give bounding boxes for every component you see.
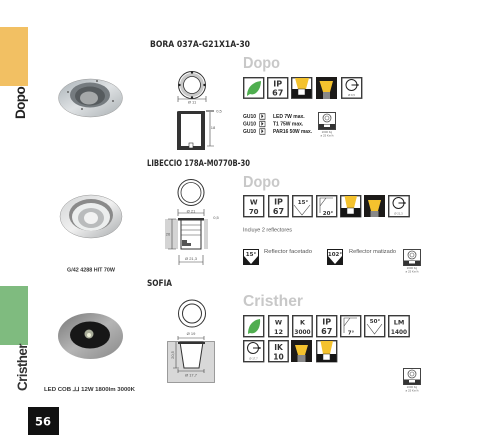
technical drawing: Bora: 18 bbox=[211, 125, 216, 130]
icon: load rating bbox=[318, 112, 336, 138]
icon: IP 67 bbox=[269, 196, 288, 217]
technical drawing: Bora: 0,5 bbox=[216, 108, 223, 114]
label: matte reflector: Reflector matizado bbox=[349, 249, 396, 255]
lamp compatibility list: GU10 bbox=[243, 114, 256, 120]
icon: K 3000: 3000 bbox=[294, 330, 311, 336]
icon: cut-out gauge: Ø 17,7 bbox=[249, 356, 258, 360]
icon: W 12 bbox=[269, 316, 288, 337]
icon: beam 15 degrees bbox=[293, 196, 312, 217]
tab: Dopo colour bbox=[0, 27, 28, 86]
page number bbox=[28, 407, 59, 435]
note: reflectors included: Incluye 2 reflectores bbox=[243, 228, 292, 234]
lamp compatibility list: LED 7W max. bbox=[273, 114, 305, 120]
technical drawing: Bora bbox=[177, 71, 223, 150]
icon: IP 67: 67 bbox=[272, 88, 283, 98]
icon: K 3000: K bbox=[300, 318, 306, 326]
technical drawing: Libeccio: 0,5 bbox=[213, 215, 220, 220]
icon: reflector 102 degrees bbox=[327, 249, 343, 265]
icon: beam dark bbox=[364, 195, 385, 217]
icon: cut-out gauge bbox=[389, 196, 409, 217]
icon: tilt 20 degrees: 20° bbox=[323, 211, 333, 217]
icon: tilt 7 degrees bbox=[341, 316, 361, 337]
icon: IP 67: 67 bbox=[273, 207, 284, 216]
icon: IK 10: 10 bbox=[273, 352, 284, 362]
lamp compatibility list bbox=[243, 113, 313, 135]
icon: load rating: ø 25 Km/h bbox=[406, 388, 419, 392]
icon: cut-out gauge: Ø 21,3 bbox=[394, 212, 403, 216]
icon: W 70 bbox=[244, 196, 264, 217]
icon: IK 10 bbox=[269, 341, 288, 362]
lamp compatibility list: PAR16 50W max. bbox=[273, 129, 313, 135]
lamp compatibility list: ⏵⃞ bbox=[259, 120, 266, 128]
lamp compatibility list: ⏵⃞ bbox=[259, 128, 266, 135]
technical drawing: Libeccio: 26 bbox=[166, 232, 171, 236]
icon: tilt 7 degrees: 7° bbox=[348, 330, 355, 336]
technical drawing: Libeccio bbox=[165, 180, 220, 265]
icon: reflector 15 degrees: 15° bbox=[246, 252, 256, 258]
icon: beam up bbox=[292, 78, 312, 98]
icon: W 70: W bbox=[250, 198, 258, 206]
technical drawing: Sofia: Ø 17,7 bbox=[185, 372, 198, 378]
product photo: Sofia lamp bbox=[58, 313, 123, 359]
icon: W 12: W bbox=[275, 318, 282, 326]
tab label: Dopo: Dopo bbox=[13, 87, 28, 119]
icon: cut-out gauge bbox=[342, 78, 362, 98]
icon: reflector 15 degrees bbox=[243, 249, 259, 265]
icon: beam 15 degrees: 15° bbox=[298, 200, 308, 206]
icon: beam dark bbox=[291, 340, 312, 362]
icon: LM 1400: LM bbox=[394, 318, 404, 326]
icon: W 12: 12 bbox=[274, 328, 283, 336]
icon: load rating: ø 25 Km/h bbox=[406, 270, 419, 274]
technical drawing: Libeccio: Ø 21,3 bbox=[185, 256, 198, 261]
product photo: Libeccio lamp bbox=[60, 195, 122, 238]
tab: Cristher colour bbox=[0, 286, 28, 345]
heading: Cristher: Cristher bbox=[243, 293, 303, 310]
technical drawing: Bora: Ø 11 bbox=[188, 100, 197, 104]
heading: Dopo (Libeccio): Dopo bbox=[243, 174, 280, 191]
icon: IP 67 bbox=[268, 78, 288, 98]
icon: cut-out gauge bbox=[244, 341, 264, 362]
icon: load rating: 2000 Kg bbox=[407, 266, 418, 270]
icon: load rating bbox=[404, 368, 420, 392]
lamp compatibility list: T1 75W max. bbox=[273, 122, 304, 128]
icon: W 70: 70 bbox=[249, 208, 259, 216]
heading: Dopo (Bora): Dopo bbox=[243, 55, 280, 72]
title: Bora: BORA 037A-G21X1A-30 bbox=[150, 40, 250, 50]
icon: load rating bbox=[404, 250, 420, 274]
icon: IK 10: IK bbox=[274, 343, 284, 352]
icon: IP 67: IP bbox=[274, 198, 283, 206]
icon: beam up bbox=[341, 196, 361, 217]
lamp compatibility list: GU10 bbox=[243, 122, 256, 128]
icon: K 3000 bbox=[293, 316, 312, 337]
icon: reflector 102 degrees: 102° bbox=[328, 252, 342, 258]
icon: LM 1400: 1400 bbox=[391, 330, 407, 336]
title: Sofia: SOFIA bbox=[147, 279, 172, 289]
icon: leaf bbox=[244, 316, 264, 337]
icon: beam 50 degrees: 50° bbox=[370, 319, 380, 325]
icon: beam dark bbox=[316, 77, 337, 99]
technical drawing: Sofia: Ø 19 bbox=[187, 331, 196, 336]
technical drawing: Sofia bbox=[168, 300, 214, 382]
icon: LM 1400 bbox=[389, 316, 409, 337]
icon: leaf bbox=[244, 78, 264, 98]
icon: cut-out gauge: Ø 9,5 bbox=[348, 93, 355, 97]
product photo: Bora lamp bbox=[58, 79, 122, 117]
icon: load rating: 2000 Kg bbox=[407, 385, 418, 389]
icon: load rating: ø 25 Km/h bbox=[321, 134, 334, 138]
icon: load rating: 2000 Kg bbox=[322, 130, 333, 134]
product label: Sofia specs: LED COB ⅃⅃ 12W 1800lm 3000K bbox=[44, 386, 135, 393]
product label: Libeccio specs: G/42 4288 HIT 70W bbox=[67, 268, 116, 274]
label: faceted reflector: Reflector facetado bbox=[264, 249, 312, 255]
technical drawing: Libeccio: Ø 21 bbox=[187, 208, 196, 214]
icon: tilt 20 degrees bbox=[317, 196, 337, 217]
page number: 56 bbox=[35, 414, 51, 428]
icon: beam 50 degrees bbox=[365, 316, 385, 337]
tab label: Cristher: Cristher bbox=[15, 343, 30, 391]
icon: beam up bbox=[317, 341, 337, 362]
icon: IP 67 bbox=[317, 316, 337, 337]
technical drawing: Sofia: 20,5 bbox=[170, 350, 175, 359]
icon: IP 67: 67 bbox=[321, 327, 332, 336]
lamp compatibility list: GU10 bbox=[243, 129, 256, 135]
lamp compatibility list: ⏵⃞ bbox=[259, 113, 266, 120]
icon: IP 67: IP bbox=[322, 318, 331, 326]
title: Libeccio: LIBECCIO 178A-M0770B-30 bbox=[147, 159, 250, 169]
icon: IP 67: IP bbox=[273, 80, 282, 88]
